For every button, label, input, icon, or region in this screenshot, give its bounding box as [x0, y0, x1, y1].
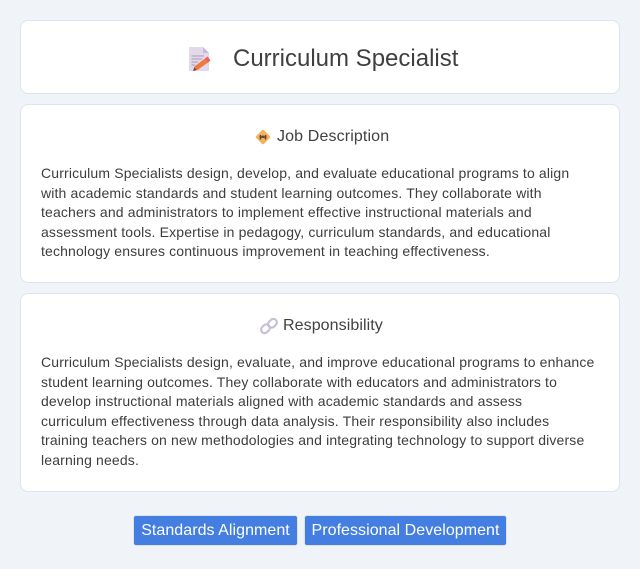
text: responsibility: [41, 354, 594, 468]
heading text: Job Description: [277, 128, 389, 145]
panel: job description: [20, 104, 620, 283]
panel: title card: [20, 20, 620, 94]
icon: diamond sign: [256, 130, 270, 144]
title: Curriculum Specialist: [233, 45, 458, 72]
text: job description: [41, 165, 569, 259]
heading text: Responsibility: [283, 317, 383, 334]
panel: responsibility: [20, 293, 620, 492]
tag: standards alignment: [134, 516, 297, 545]
text: responsibility: develop instructional materials aligned with academic standards and assess: [41, 393, 522, 409]
text: responsibility: curriculum effectiveness through data analysis. Their responsibility also includes: [41, 413, 549, 429]
text: job description: with academic standards and student learning outcomes. They collaborate with: [41, 185, 542, 201]
text: job description: Curriculum Specialists design, develop, and evaluate educational programs to align: [41, 165, 569, 181]
icon: chain link: [260, 318, 278, 334]
tag: standards alignment: Standards Alignment: [141, 522, 290, 539]
text: responsibility: learning needs.: [41, 452, 139, 468]
heading: responsibility: [260, 317, 383, 334]
text: responsibility: student learning outcomes. They collaborate with educators and administrators to: [41, 374, 557, 390]
tag: professional development: Professional Development: [312, 522, 499, 539]
icon: document with pencil: [189, 47, 210, 71]
text: job description: technology ensures continuous improvement in teaching effectiveness.: [41, 243, 490, 259]
text: job description: assessment tools. Expertise in pedagogy, curriculum standards, and educational: [41, 224, 550, 240]
text: responsibility: Curriculum Specialists design, evaluate, and improve educational programs to enhance: [41, 354, 594, 370]
heading: job description: [256, 128, 389, 145]
tag: professional development: [305, 516, 506, 545]
text: job description: teachers and administrators to implement effective instructional materials and: [41, 204, 532, 220]
text: responsibility: training teachers on new methodologies and integrating technology to support diverse: [41, 432, 584, 448]
